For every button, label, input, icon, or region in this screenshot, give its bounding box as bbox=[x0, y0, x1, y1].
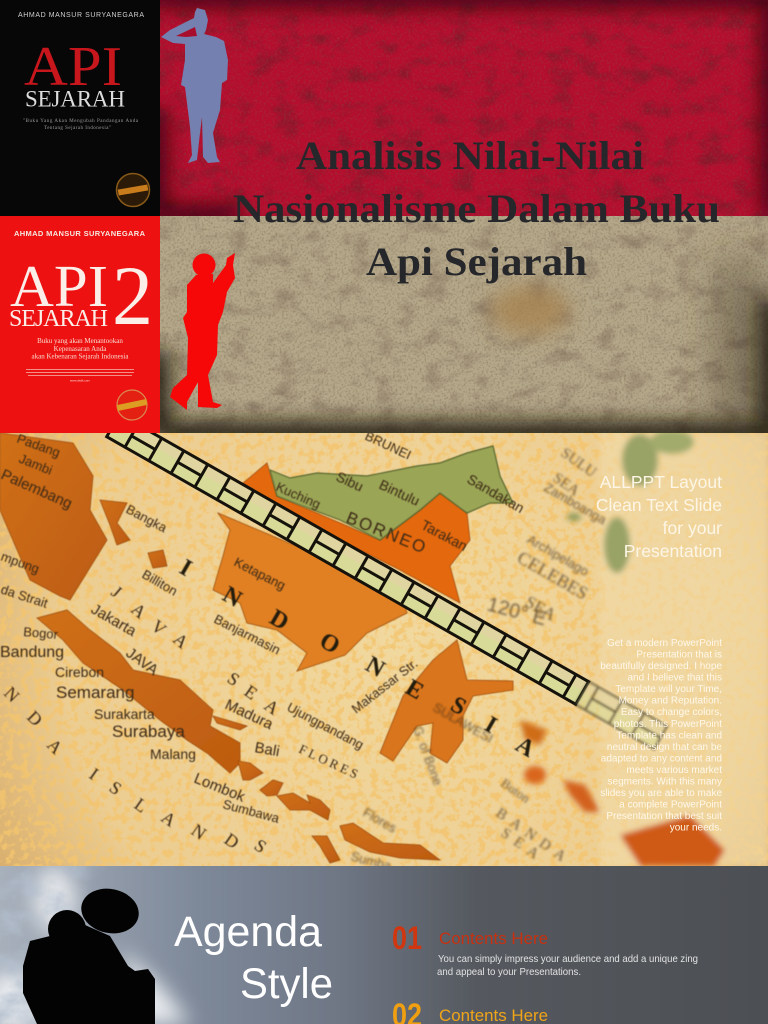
title bbox=[233, 133, 720, 284]
map labels: Surakarta bbox=[94, 706, 155, 722]
map labels: Jambi bbox=[17, 451, 55, 478]
map labels: Tarakan bbox=[419, 517, 470, 554]
map labels: Cirebon bbox=[55, 664, 104, 680]
map labels: Banjarmasin bbox=[212, 611, 283, 657]
map labels: JAVA bbox=[123, 644, 161, 679]
blurred map labels at right: Buton bbox=[498, 775, 533, 806]
map labels: Padang bbox=[15, 431, 62, 460]
blurred map labels at right: SEA bbox=[498, 825, 547, 867]
map labels: Surabaya bbox=[112, 722, 185, 741]
blurred map labels at right: SEA bbox=[522, 592, 560, 625]
book cover: Api Sejarah: Tentang Sejarah Indonesia" bbox=[44, 126, 111, 131]
map labels: BRUNEI bbox=[363, 428, 414, 462]
agenda heading: Style bbox=[240, 960, 333, 1008]
title: Analisis Nilai-Nilai bbox=[296, 133, 644, 178]
book cover: Api Sejarah 2: 2 bbox=[112, 249, 153, 343]
book cover: Api Sejarah 2: Kepenasaran Anda bbox=[54, 345, 107, 353]
map body text: Money and Reputation. bbox=[619, 696, 722, 707]
map body text: adapted to any content and bbox=[601, 753, 722, 764]
agenda item 01: Contents Here bbox=[439, 930, 548, 948]
map labels: SEA bbox=[224, 668, 283, 719]
map body text: Template will your Time, bbox=[615, 684, 722, 695]
map body text: photos. This PowerPoint bbox=[614, 719, 722, 730]
map labels: Makassar Str. bbox=[349, 656, 420, 716]
panel: map slide bbox=[0, 414, 768, 874]
blurred map labels at right: Flores bbox=[360, 805, 400, 836]
map body text: slides you are able to make bbox=[600, 788, 722, 799]
map labels: BORNEO bbox=[344, 508, 430, 558]
map body text: and I believe that this bbox=[627, 673, 722, 684]
blurred map labels at right: Sumba bbox=[349, 848, 394, 874]
blurred map labels at right: SEA bbox=[550, 470, 582, 500]
map labels: Kuching bbox=[274, 479, 323, 512]
map labels: Malang bbox=[150, 746, 196, 762]
blurred map labels at right: SULU bbox=[558, 445, 599, 481]
panel: agenda slide bbox=[0, 866, 768, 1024]
map labels: da Strait bbox=[0, 582, 50, 611]
map labels: Sandakan bbox=[464, 471, 527, 516]
map body text: Presentation that best suit bbox=[606, 811, 722, 822]
book cover: Api Sejarah: "Buku Yang Akan Mengubah Pandangan Anda bbox=[23, 119, 139, 124]
agenda item 01 bbox=[393, 926, 698, 977]
sky background bbox=[0, 866, 768, 1024]
agenda heading bbox=[174, 908, 333, 1008]
book cover: Api Sejarah: AHMAD MANSUR SURYANEGARA bbox=[18, 12, 144, 19]
map labels: Madura bbox=[222, 696, 276, 733]
map body text: segments. With this many bbox=[608, 776, 722, 788]
map heading text: ALLPPT Layout bbox=[600, 472, 722, 492]
map heading text: Presentation bbox=[624, 541, 722, 561]
map labels bbox=[0, 428, 540, 857]
map labels: Palembang bbox=[0, 466, 75, 513]
map labels: Semarang bbox=[56, 683, 134, 702]
equator graticule band bbox=[107, 414, 589, 704]
icon: statue silhouette bbox=[23, 883, 155, 1024]
icon: marching soldier silhouette bbox=[170, 253, 235, 410]
map labels: Ujungpandang bbox=[285, 699, 366, 752]
map labels: ISLANDS bbox=[86, 764, 270, 857]
panel: flag slide bbox=[0, 0, 768, 436]
book cover: Api Sejarah: API bbox=[24, 36, 122, 98]
map labels: NDA bbox=[0, 683, 67, 758]
flag red stripe bbox=[150, 0, 768, 216]
book cover: Api Sejarah: SEJARAH bbox=[25, 86, 125, 112]
book cover: Api Sejarah 2: SEJARAH bbox=[9, 306, 108, 332]
map orange speckle bbox=[0, 433, 768, 866]
map labels: FLORES bbox=[297, 741, 363, 783]
blurred map labels at right: Archipelago bbox=[524, 532, 591, 579]
map body text: your needs. bbox=[670, 823, 722, 834]
agenda heading: Agenda bbox=[174, 908, 322, 956]
map labels: JAVA bbox=[107, 582, 192, 652]
blurred map labels at right: G. of Bone bbox=[410, 724, 446, 787]
blurred map labels at right: SULAWESI bbox=[430, 700, 496, 746]
map labels: Jakarta bbox=[88, 601, 140, 640]
map body text: a complete PowerPoint bbox=[619, 800, 722, 811]
title: Nasionalisme Dalam Buku bbox=[233, 186, 720, 231]
title: Api Sejarah bbox=[366, 239, 587, 284]
map labels: mpung bbox=[0, 549, 41, 576]
map labels: Billiton bbox=[140, 567, 180, 599]
map labels: Sibu bbox=[334, 468, 366, 495]
blurred map labels at right: BANDA bbox=[493, 805, 574, 869]
map background bbox=[0, 433, 768, 866]
map body text: neutral design that can be bbox=[607, 742, 722, 753]
map labels: Sumbawa bbox=[221, 796, 282, 826]
map labels: Lombok bbox=[192, 770, 248, 806]
book cover: Api Sejarah 2: AHMAD MANSUR SURYANEGARA bbox=[14, 229, 146, 238]
agenda item 01: You can simply impress your audience and add a unique zing bbox=[438, 953, 698, 965]
map body text: Template has clean and bbox=[616, 730, 722, 741]
flag tan stripe bbox=[156, 216, 768, 436]
book cover: Api Sejarah 2: API bbox=[10, 253, 108, 319]
map body text: beautifully designed. I hope bbox=[600, 661, 722, 672]
map labels: Bogor bbox=[23, 624, 59, 642]
green land: Sabah and Sarawak bbox=[270, 446, 513, 540]
icon: saluting soldier silhouette bbox=[161, 8, 228, 163]
map labels: Ketapang bbox=[232, 554, 288, 593]
book cover: Api Sejarah 2 bbox=[0, 216, 160, 433]
map body text: Easy to change colors, bbox=[621, 707, 722, 718]
book cover: Api Sejarah 2: www.dsdk.com bbox=[70, 378, 90, 382]
clouds bbox=[0, 866, 190, 1024]
map heading text: Clean Text Slide bbox=[596, 495, 722, 515]
book cover: Api Sejarah 2: Buku yang akan Menantookan bbox=[37, 337, 123, 345]
blurred map labels at right: Zamboanga bbox=[542, 480, 610, 528]
map labels: INDONESIA bbox=[175, 555, 540, 763]
blurred map labels at right bbox=[349, 445, 610, 874]
landmasses bbox=[0, 433, 513, 863]
agenda item 02 bbox=[393, 1003, 548, 1024]
blurred map labels at right: CELEBES bbox=[514, 547, 592, 603]
map labels: Bintulu bbox=[377, 476, 422, 509]
agenda item 01: and appeal to your Presentations. bbox=[437, 966, 581, 978]
blurred map labels at right: 120° E bbox=[485, 594, 549, 630]
faded end of band bbox=[576, 682, 667, 749]
map labels: Bandung bbox=[0, 644, 64, 661]
map heading text: for your bbox=[663, 518, 722, 538]
blurred right side of map bbox=[520, 430, 768, 866]
book cover: Api Sejarah 2: akan Kebenaran Sejarah Indonesia bbox=[32, 352, 129, 360]
map body text: meets various market bbox=[626, 765, 722, 776]
map body text: Get a modern PowerPoint bbox=[607, 638, 722, 649]
map labels: Bangka bbox=[124, 501, 170, 536]
book cover: Api Sejarah bbox=[18, 12, 150, 208]
map body text bbox=[600, 638, 722, 834]
map heading text bbox=[596, 472, 722, 561]
agenda item 01: 01 bbox=[392, 920, 422, 956]
map labels: Bali bbox=[253, 739, 281, 760]
map body text: Presentation that is bbox=[636, 650, 722, 660]
